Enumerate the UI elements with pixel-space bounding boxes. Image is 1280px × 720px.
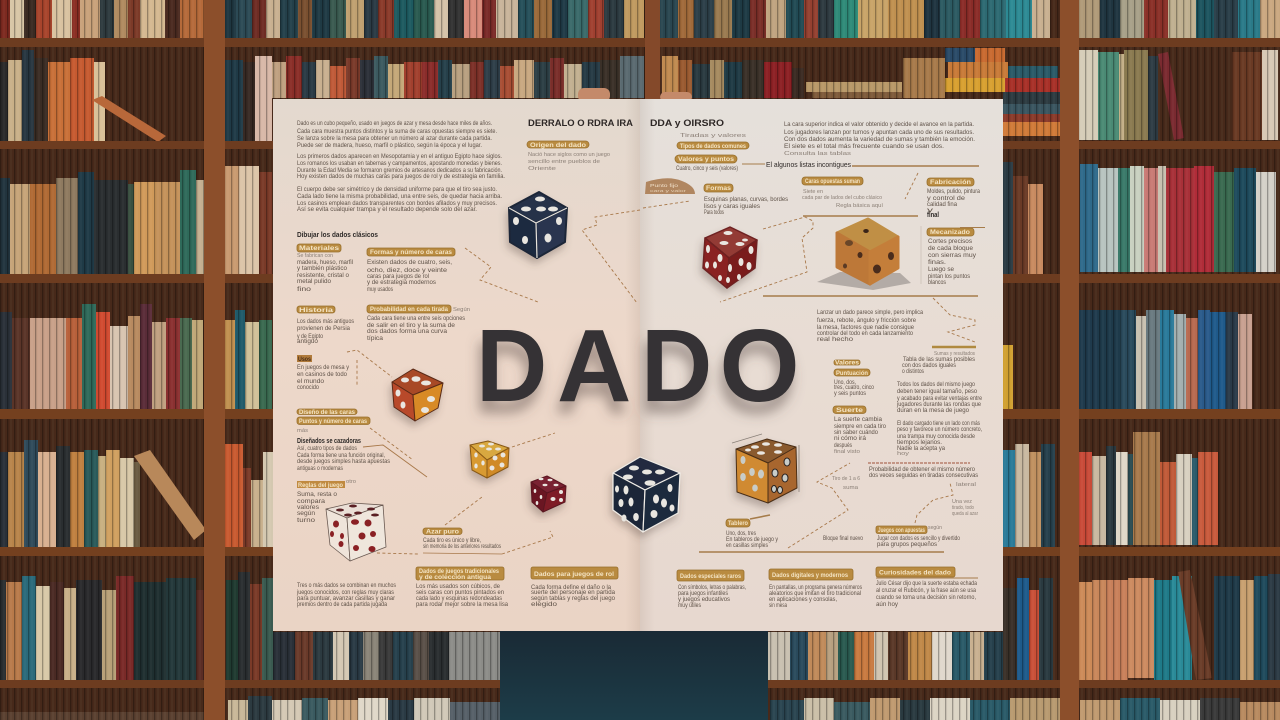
panel: left page intro: Se lanza sobre la mesa para obtener un número al azar durante cada partida.	[297, 135, 492, 142]
text block: far right paragraphs: Nadie la acepta ya	[897, 445, 946, 452]
label block: centre right	[802, 177, 883, 209]
text block: right page intro: Consulta las tablas	[784, 151, 851, 157]
small side notes: Una vez	[952, 499, 972, 505]
label block: diseño de caras: desde juegos simples hasta apuestas	[297, 458, 390, 465]
title: DADO: A	[557, 308, 631, 423]
label block: azar right: sin saber cuándo	[834, 429, 879, 436]
books: sixth row	[0, 570, 1280, 680]
label block: bottom one: Dados especiales raros	[680, 574, 742, 580]
label block: usos: En juegos de mesa y	[297, 364, 350, 371]
label block: diseño de caras: Puntos y número de caras	[299, 419, 368, 425]
label block: probabilidad: Cada cara tiene una entre seis opciones	[367, 315, 465, 322]
label block: bottom one	[677, 570, 746, 609]
books: bottom row	[0, 696, 1280, 720]
label block: far right two: de cada bloque	[928, 245, 974, 252]
panel: left page intro: Así se evita cualquier trampa y el resultado depende solo del azar.	[297, 206, 477, 213]
label block: bottom centre right: elegido	[531, 601, 558, 608]
books: fourth row	[0, 304, 1252, 410]
text block: far right paragraphs: peso y favorece un número concreto,	[897, 426, 982, 433]
label block: bottom centre right	[531, 567, 618, 608]
label block: centre right: cada par de lados del cubo clásico	[802, 195, 882, 201]
tab: brown callout: Punto fijo	[650, 183, 678, 189]
divider heading: right page: El algunos listas incontigues	[766, 160, 851, 169]
label block: probabilidad: Según	[453, 307, 470, 313]
label block: azar right: final visto	[834, 449, 860, 455]
label block: bottom centre left	[416, 567, 509, 608]
label block: reglas: turno	[297, 517, 316, 524]
label block: bottom three: aún hoy	[876, 601, 899, 608]
label block: formas: ocho, diez, doce y veinte	[367, 267, 448, 274]
label block: historia	[297, 306, 354, 345]
label block: bottom two	[769, 569, 862, 609]
label block: azar: Azar puro	[426, 530, 459, 536]
label block: diseño de caras: antiguas o modernas	[297, 465, 343, 472]
icon: copper die right	[732, 434, 799, 503]
label block: note right: o distintos	[902, 368, 924, 375]
person behind the poster	[500, 88, 768, 720]
text block: bottom left: premios dentro de cada partida jugada	[297, 601, 387, 608]
label block: bottom small	[726, 515, 779, 549]
label block: right page top pills: Tiradas y valores	[680, 133, 746, 139]
text block: red line note: dos veces seguidas en tiradas consecutivas	[869, 472, 978, 479]
tab: brown callout	[645, 178, 695, 194]
label block: far right two: Cortes precisos	[928, 238, 972, 245]
text block: far right paragraphs: El dado cargado tiene un lado con más	[897, 420, 980, 427]
text block: right page intro: El siete es el total más frecuente cuando se usan dos.	[784, 143, 944, 150]
label block: formas: caras para juegos de rol	[367, 273, 429, 280]
text block: right middle: real hecho	[817, 336, 854, 343]
label block: azar right: La suerte cambia	[834, 416, 883, 423]
label block: bottom centre right: Cada forma define el daño o la	[531, 584, 612, 591]
text block: right middle	[817, 309, 923, 343]
label block: diseño de caras: más	[297, 428, 308, 434]
label block: diseño de caras: Así, cuatro tipos de dados	[297, 445, 357, 452]
leaning books	[92, 96, 206, 540]
label block: usos: el mundo	[297, 378, 325, 385]
label block: probabilidad: Probabilidad en cada tirada	[370, 307, 449, 313]
text block: left page top: Oriente	[528, 166, 556, 172]
icon: red die	[703, 227, 757, 288]
label: left page top pill	[527, 141, 589, 149]
label block: materiales: Materiales	[299, 246, 340, 252]
label block: azar right	[833, 406, 887, 455]
text block: red line note	[868, 463, 978, 479]
label block: probabilidad	[367, 305, 470, 342]
label block: formas: Formas y número de caras	[370, 250, 453, 256]
label block: far right two: finas.	[928, 259, 946, 266]
text block: far right paragraphs: una trampa muy conocida desde	[897, 433, 975, 440]
label block: materiales: metal pulido	[297, 278, 332, 285]
panel: left page intro: Cada lado tiene la misma probabilidad, una entre seis, de quedar hacia arriba.	[297, 193, 502, 200]
label block: usos: en casinos de todo	[297, 371, 348, 378]
text block: bottom left: juegos conocidos, con reglas muy claras	[296, 589, 394, 596]
panel: left page intro: Cada cara muestra puntos distintos y la suma de caras opuestas siempre es siete.	[297, 128, 497, 135]
label block: historia: antiguo	[297, 338, 319, 345]
text block: far right paragraphs: deben tener igual tamaño, peso	[897, 388, 978, 395]
label block: reglas: según	[297, 510, 316, 517]
label block: centre mid pills: Valores	[835, 360, 860, 366]
title: DADO: O	[720, 308, 800, 423]
label block: right page top pills	[675, 133, 749, 172]
text block: right middle: fuerza, rebote, ángulo y fricción sobre	[817, 317, 917, 324]
text block: far right paragraphs	[896, 381, 982, 457]
panel: left page intro	[297, 120, 505, 213]
label block: bottom two: aleatorios que imitan el tiro tradicional	[769, 590, 861, 597]
label block: probabilidad: de salir en el tiro y la suma de	[367, 322, 456, 329]
text block: far right paragraphs: y acabado para evitar ventajas entre	[897, 395, 982, 402]
label block: historia: Los dados más antiguos	[297, 318, 354, 325]
label block: reglas: valores	[297, 504, 319, 511]
label block: historia: provienen de Persia	[297, 325, 351, 332]
tab: brown callout: cara y valor	[650, 188, 687, 193]
label block: historia: Historia	[299, 308, 334, 314]
text block: red line note: Probabilidad de obtener el mismo número	[869, 466, 976, 473]
label block: bottom right small: Jugar con dados es sencillo y divertido	[877, 535, 960, 542]
label block: bottom centre right: suerte del personaje en partida	[531, 589, 616, 596]
label block: bottom three: Curiosidades del dado	[879, 570, 951, 576]
label block: azar right: siempre en cada tiro	[834, 423, 887, 430]
label block: bottom small: Uno, dos, tres	[726, 530, 756, 537]
label block: bottom small: En tableros de juego y	[726, 536, 779, 543]
panel: left page intro: Hoy existen dados de muchas caras para juegos de rol y de estrategia en familia.	[297, 173, 505, 180]
label block: probabilidad: típica	[367, 335, 384, 342]
panel: left page intro: Dado es un cubo pequeño, usado en juegos de azar y mesa desde hace miles de años.	[297, 120, 492, 127]
label block: formas right	[704, 184, 788, 216]
label block: bottom right small: según	[928, 525, 942, 531]
small side notes: lateral	[956, 482, 976, 488]
label block: far right two: pintan los puntos	[928, 273, 970, 280]
books: second row	[0, 48, 1278, 141]
text block: right middle: Lanzar un dado parece simple, pero implica	[817, 309, 923, 316]
label block: bottom one: para juegos infantiles	[678, 590, 728, 597]
label block: right page top pills: Valores y puntos	[678, 157, 735, 163]
text block: bottom left: para puntuar, avanzar casillas y ganar	[297, 595, 395, 602]
label block: far right two	[927, 228, 985, 286]
label block: bottom centre left: y de colección antigua	[419, 575, 492, 581]
icon: yellow die	[470, 441, 509, 478]
label block: note right: Sumas y resultados	[934, 351, 975, 357]
label block: far right one: y	[927, 207, 935, 214]
label block: materiales: fino	[297, 286, 312, 293]
label block: azar right: ni cómo irá	[834, 435, 867, 442]
text block: far right paragraphs: jugadores durante las rondas que	[896, 401, 981, 408]
icon: large navy die	[613, 457, 680, 532]
small side notes: Tiro de 1 a 6	[832, 476, 860, 482]
label block: note right: Tabla de las sumas posibles	[903, 356, 975, 363]
label block: formas: y de estrategia modernos	[367, 279, 436, 286]
label block: far right one	[927, 178, 980, 219]
label block: far right one: final	[927, 210, 939, 219]
icon: white die with red pips	[326, 503, 386, 561]
label block: centre right: Regla básica aquí	[836, 203, 883, 209]
label block: far right one: y control de	[927, 195, 966, 202]
label block: usos: Usos	[298, 357, 312, 363]
label block: bottom one: muy útiles	[678, 602, 701, 609]
label block: diseño de caras: Diseño de las caras	[299, 410, 356, 416]
label block: far right two: blancos	[928, 279, 946, 286]
label block: centre right: Siete en	[803, 189, 823, 195]
label block: diseño de caras: Diseñados se cazadoras	[297, 436, 361, 445]
label block: far right one: Moldes, pulido, pintura	[927, 188, 980, 195]
panel: left page intro: El cuerpo debe ser simétrico y de densidad uniforme para que el tiro sea justo.	[297, 186, 497, 193]
label block: materiales: y también plástico	[297, 265, 348, 272]
text block: far right paragraphs: tiempos lejanos.	[897, 439, 942, 446]
text block: right page intro	[784, 121, 975, 157]
books: fifth row	[0, 432, 1218, 547]
text block: right page intro: Los jugadores lanzan por turnos y apuntan cada uno de sus resultados.	[784, 129, 974, 136]
small side notes: queda al azar	[952, 511, 978, 517]
label block: note right	[902, 347, 976, 375]
label block: formas right: Formas	[706, 186, 732, 192]
label block: bottom small: en casillas simples	[726, 542, 768, 549]
label block: note right: con dos dados iguales	[902, 362, 956, 369]
label block: reglas: Suma, resta o	[297, 491, 338, 498]
text block: right middle: la mesa, factores que nadie consigue	[817, 324, 915, 331]
label block: diseño de caras	[297, 409, 390, 472]
label block: azar right: después	[834, 442, 852, 449]
label block: reglas	[297, 479, 356, 524]
label block: bottom three: Julio César dijo que la suerte estaba echada	[876, 580, 977, 587]
small side notes: tirado, todo	[952, 505, 974, 511]
label block: bottom three: cuando se toma una decisión sin retorno,	[876, 594, 976, 601]
label block: materiales: resistente, cristal o	[297, 272, 350, 279]
label block: usos: conocido	[297, 384, 319, 391]
small side notes	[832, 476, 978, 517]
label block: centre mid pills: tres, cuatro, cinco	[834, 384, 874, 391]
label block: bottom centre right: según tablas y reglas del juego	[531, 595, 616, 602]
label block: right page top pills: Cuatro, cinco y seis (valores)	[676, 165, 738, 172]
dashed connector arrows	[347, 173, 975, 554]
label block: formas right: lisos y caras iguales	[704, 203, 760, 210]
books: top row	[0, 0, 1280, 38]
title: DADO: D	[476, 308, 547, 423]
icon: wooden die with shadow	[817, 219, 911, 290]
small side notes: suma	[843, 485, 859, 491]
label block: diseño de caras: Cada forma tiene una función original,	[297, 452, 385, 459]
label block: bottom small: Tablero	[728, 521, 748, 527]
text: small mid note: Bloque final nuevo	[823, 535, 863, 542]
label block: bottom centre left: para rodar mejor sobre la mesa lisa	[416, 601, 509, 608]
text block: left page top: Nació hace siglos como un juego	[528, 152, 610, 158]
label block: formas	[367, 248, 455, 293]
text block: right page intro: Con dos dados aumenta la variedad de sumas y también la emoción.	[784, 136, 975, 143]
label block: historia: y de Egipto	[297, 333, 323, 340]
label block: bottom centre right: Dados para juegos de rol	[534, 572, 614, 578]
label block: reglas: Reglas del juego	[298, 483, 343, 489]
label block: azar: Cada tiro es único y libre,	[423, 537, 481, 544]
label block: centre mid pills: Uno, dos,	[834, 379, 856, 386]
label block: far right one: Fabricación	[930, 180, 971, 186]
label block: usos	[297, 355, 350, 391]
label block: far right one: calidad fina	[927, 201, 958, 208]
label block: bottom centre left: cada lado y esquinas redondeadas	[416, 595, 502, 602]
label block: materiales	[297, 244, 353, 293]
panel: left page intro: Los romanos los usaban en tabernas y campamentos, apostando monedas y bienes.	[297, 160, 502, 167]
label block: bottom two: sin mesa	[769, 602, 787, 609]
text block: left page top	[528, 152, 610, 172]
heading: left column: Dibujar los dados clásicos	[297, 230, 378, 239]
label block: formas: Existen dados de cuatro, seis,	[367, 259, 452, 266]
label block: right page top pills: Tipos de dados comunes	[680, 144, 747, 150]
text block: bottom left	[296, 582, 396, 608]
label block: bottom two: Dados digitales y modernos	[772, 573, 849, 579]
label block: bottom one: Con símbolos, letras o palabras,	[678, 584, 746, 591]
label block: bottom three: al cruzar el Rubicón, y la frase aún se usa	[876, 587, 976, 594]
text block: far right paragraphs: Todos los dados del mismo juego	[897, 381, 975, 388]
label block: centre mid pills: y seis puntos	[834, 390, 866, 397]
text block: bottom left: Tres o más dados se combinan en muchos	[297, 582, 396, 589]
label block: far right two: Mecanizado	[930, 230, 970, 236]
icon: navy die top	[509, 192, 567, 258]
text block: far right paragraphs: hoy	[897, 451, 909, 457]
label block: bottom centre left: Los más usados son cúbicos, de	[416, 583, 501, 590]
label block: formas: muy usados	[367, 286, 393, 293]
panel: left page intro: Los casinos emplean dados transparentes con bordes afilados y muy precisos.	[297, 200, 497, 207]
label block: reglas: compara	[297, 498, 326, 505]
label block: bottom centre left: Dados de juegos tradicionales	[419, 569, 500, 575]
heading: left page top: DERRALO O RDRA IRA	[528, 118, 633, 129]
label block: azar	[423, 528, 501, 550]
label block: azar: sin memoria de los anteriores resultados	[423, 543, 501, 550]
label: left page top pill: Origen del dado	[530, 143, 586, 149]
label block: materiales: Se fabrican con	[297, 253, 333, 259]
label block: far right two: Luego se	[928, 266, 955, 273]
label block: reglas: otro	[346, 479, 356, 485]
label block: bottom one: y juegos educativos	[678, 596, 730, 603]
label block: formas right: Para todos	[704, 209, 724, 216]
icon: small dark red die	[531, 476, 566, 512]
heading: right page: DDA y OIRSRO	[650, 118, 724, 129]
open poster	[273, 99, 1003, 631]
label block: bottom three	[876, 567, 978, 608]
text block: left page top: sencillo entre pueblos de	[528, 159, 600, 165]
label block: centre mid pills: Puntuación	[836, 371, 868, 377]
label block: probabilidad: dos dados forma una curva	[367, 328, 448, 335]
label block: bottom two: En pantallas, un programa genera números	[769, 584, 862, 591]
label block: bottom two: en aplicaciones y consolas,	[769, 596, 837, 603]
books: third row	[0, 162, 1276, 274]
title: DADO	[476, 308, 800, 423]
label block: azar right: Suerte	[836, 408, 864, 414]
text block: far right paragraphs: duran en la mesa de juego	[897, 407, 970, 414]
panel: left page intro: Los primeros dados aparecen en Mesopotamia y en el antiguo Egipto hace siglos.	[297, 153, 502, 160]
label block: bottom right small: para grupos pequeños	[877, 541, 937, 548]
label block: bottom centre left: seis caras con puntos pintados en	[416, 589, 505, 596]
text block: right middle: controlar del todo en cada lanzamiento	[817, 330, 913, 337]
label block: formas right: Esquinas planas, curvas, bordes	[704, 196, 788, 203]
panel: left page intro: Puede ser de madera, hueso, marfil o plástico, según la época y el lugar.	[297, 142, 482, 149]
icon: orange die left	[392, 369, 443, 421]
label block: materiales: madera, hueso, marfil	[297, 259, 353, 266]
label block: centre right: Caras opuestas suman	[805, 179, 860, 185]
label block: centre mid pills	[834, 360, 874, 397]
label block: far right two: con sierras muy	[928, 252, 977, 259]
label block: bottom right small: Juegos con apuestas	[878, 528, 926, 534]
text block: right page intro: La cara superior indica el valor obtenido y decide el avance en la partida.	[784, 121, 974, 128]
panel: left page intro: Durante la Edad Media se formaron gremios de artesanos dedicados a su fabricación.	[297, 167, 502, 174]
label block: bottom right small	[876, 525, 960, 548]
title: DADO: D	[641, 308, 712, 423]
